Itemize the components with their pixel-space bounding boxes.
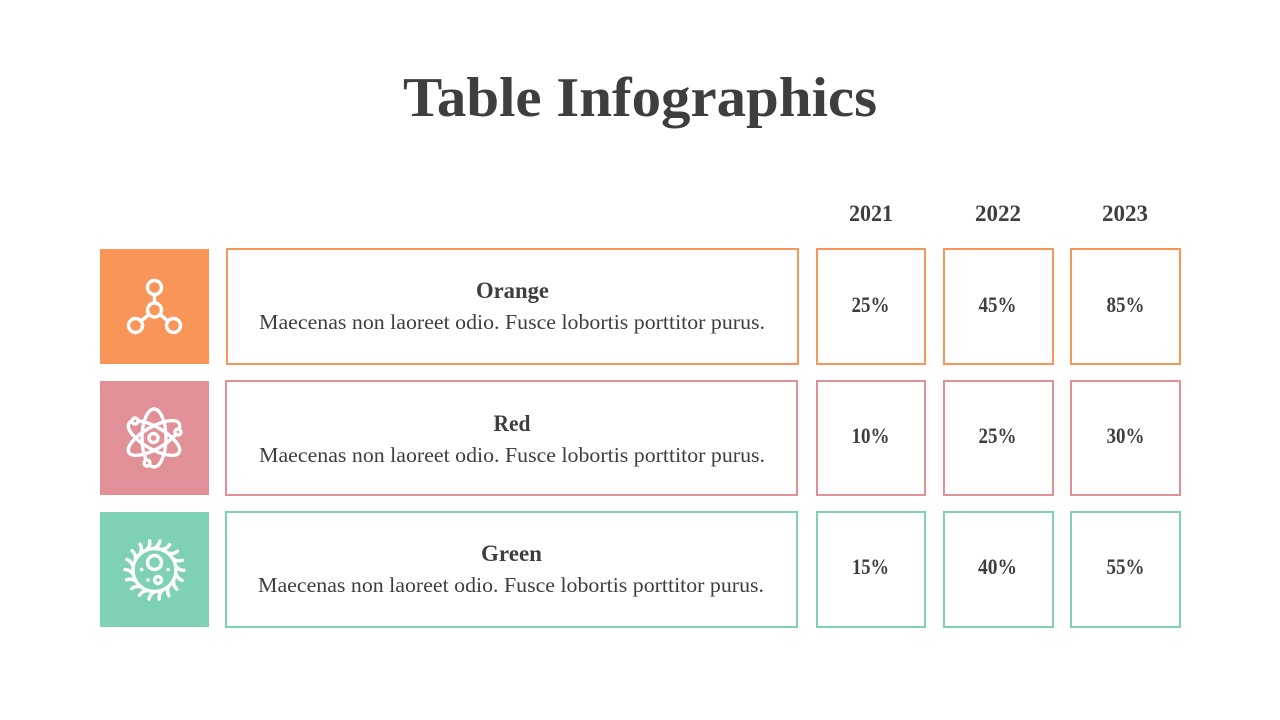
icon tile: orange network [100, 249, 209, 364]
row: red [100, 381, 1180, 495]
row: green [100, 512, 1180, 627]
description box: red: Red [494, 411, 531, 436]
description box: orange: Maecenas non laoreet odio. Fusce lobortis porttitor purus. [259, 310, 765, 334]
value 2021: red [817, 381, 925, 495]
value 2023: orange [1071, 249, 1180, 364]
title: Table Infographics [403, 67, 877, 129]
value 2021: green [817, 512, 925, 627]
column headers: 2021 [849, 201, 893, 226]
description box: green: Maecenas non laoreet odio. Fusce lobortis porttitor purus. [258, 573, 764, 597]
value 2022: orange: 45% [978, 292, 1016, 317]
value 2023: red [1071, 381, 1180, 495]
value 2022: green [944, 512, 1053, 627]
column headers: 2022 [975, 201, 1021, 226]
value 2023: green: 55% [1106, 554, 1144, 579]
description box: green [226, 512, 797, 627]
icon tile: green microbe [100, 512, 209, 627]
value 2023: orange: 85% [1106, 292, 1144, 317]
value 2022: orange [944, 249, 1053, 364]
row: orange [100, 249, 1180, 364]
value 2023: red: 30% [1106, 423, 1144, 448]
value 2023: green [1071, 512, 1180, 627]
icon tile: red atom [100, 381, 209, 495]
column headers: 2023 [1102, 201, 1148, 226]
value 2021: green: 15% [852, 554, 889, 579]
description box: green: Green [481, 541, 542, 566]
description box: orange: Orange [476, 278, 549, 303]
column headers [849, 201, 1148, 226]
description box: orange [227, 249, 798, 364]
value 2022: red [944, 381, 1053, 495]
value 2021: red: 10% [852, 423, 890, 448]
description box: red [226, 381, 797, 495]
description box: red: Maecenas non laoreet odio. Fusce lobortis porttitor purus. [259, 443, 765, 467]
value 2022: green: 40% [978, 554, 1017, 579]
value 2022: red: 25% [978, 423, 1016, 448]
value 2021: orange [817, 249, 925, 364]
value 2021: orange: 25% [852, 292, 890, 317]
